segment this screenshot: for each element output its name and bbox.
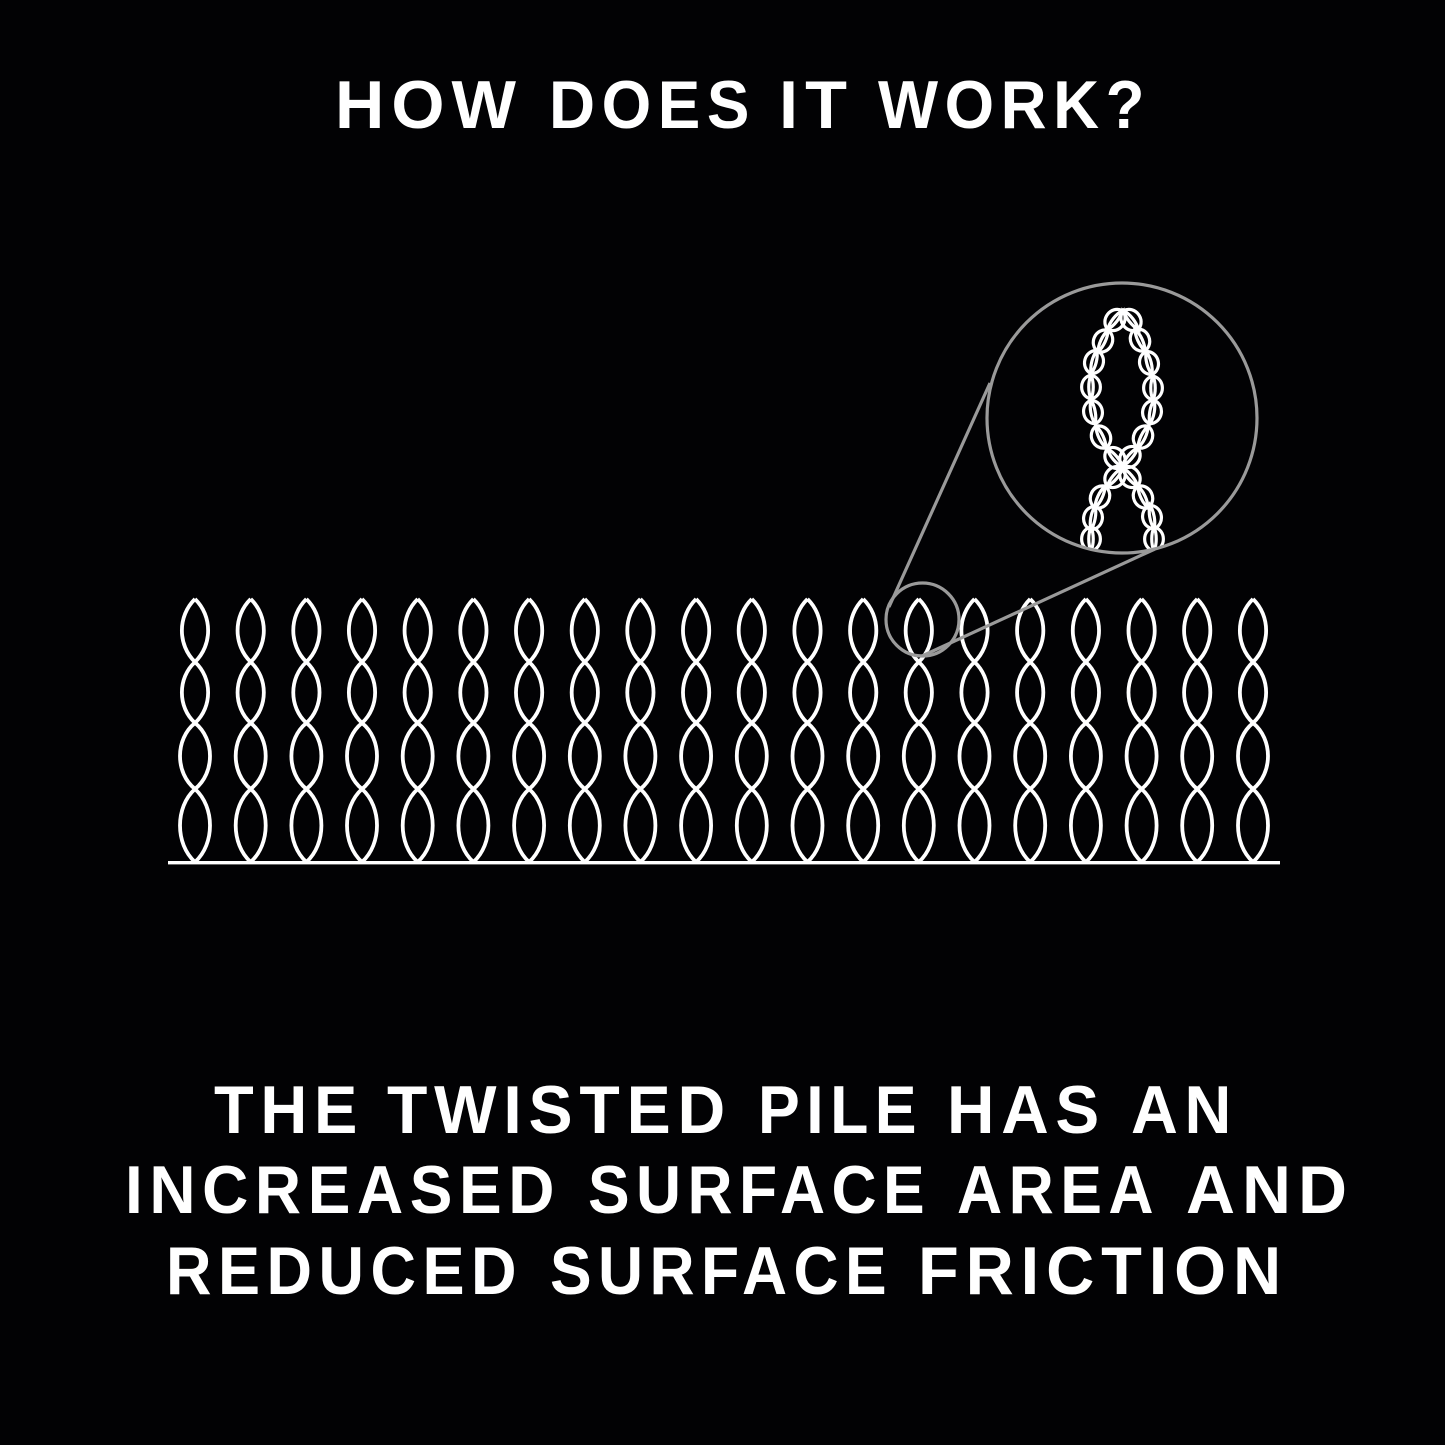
base line <box>168 861 1280 864</box>
magnified strand <box>1082 305 1163 551</box>
description text: AREA <box>957 1152 1160 1228</box>
description text: SURFACE <box>550 1233 893 1309</box>
description text: FRICTION <box>918 1233 1288 1309</box>
description text: HAS <box>947 1072 1106 1148</box>
description text: INCREASED <box>125 1152 561 1228</box>
description text: PILE <box>758 1072 923 1148</box>
description text: SURFACE <box>588 1152 931 1228</box>
twisted pile strands <box>180 599 1268 862</box>
description text: REDUCED <box>166 1233 523 1309</box>
description text: THE <box>214 1072 364 1148</box>
description text: AND <box>1186 1152 1354 1228</box>
description text: TWISTED <box>387 1072 732 1148</box>
title: WORK? <box>878 67 1151 143</box>
title: HOW <box>335 67 523 143</box>
title: DOES <box>549 67 756 143</box>
description text <box>125 1072 1354 1309</box>
description text: AN <box>1131 1072 1238 1148</box>
title: IT <box>779 67 854 143</box>
magnifier callout <box>886 283 1257 656</box>
